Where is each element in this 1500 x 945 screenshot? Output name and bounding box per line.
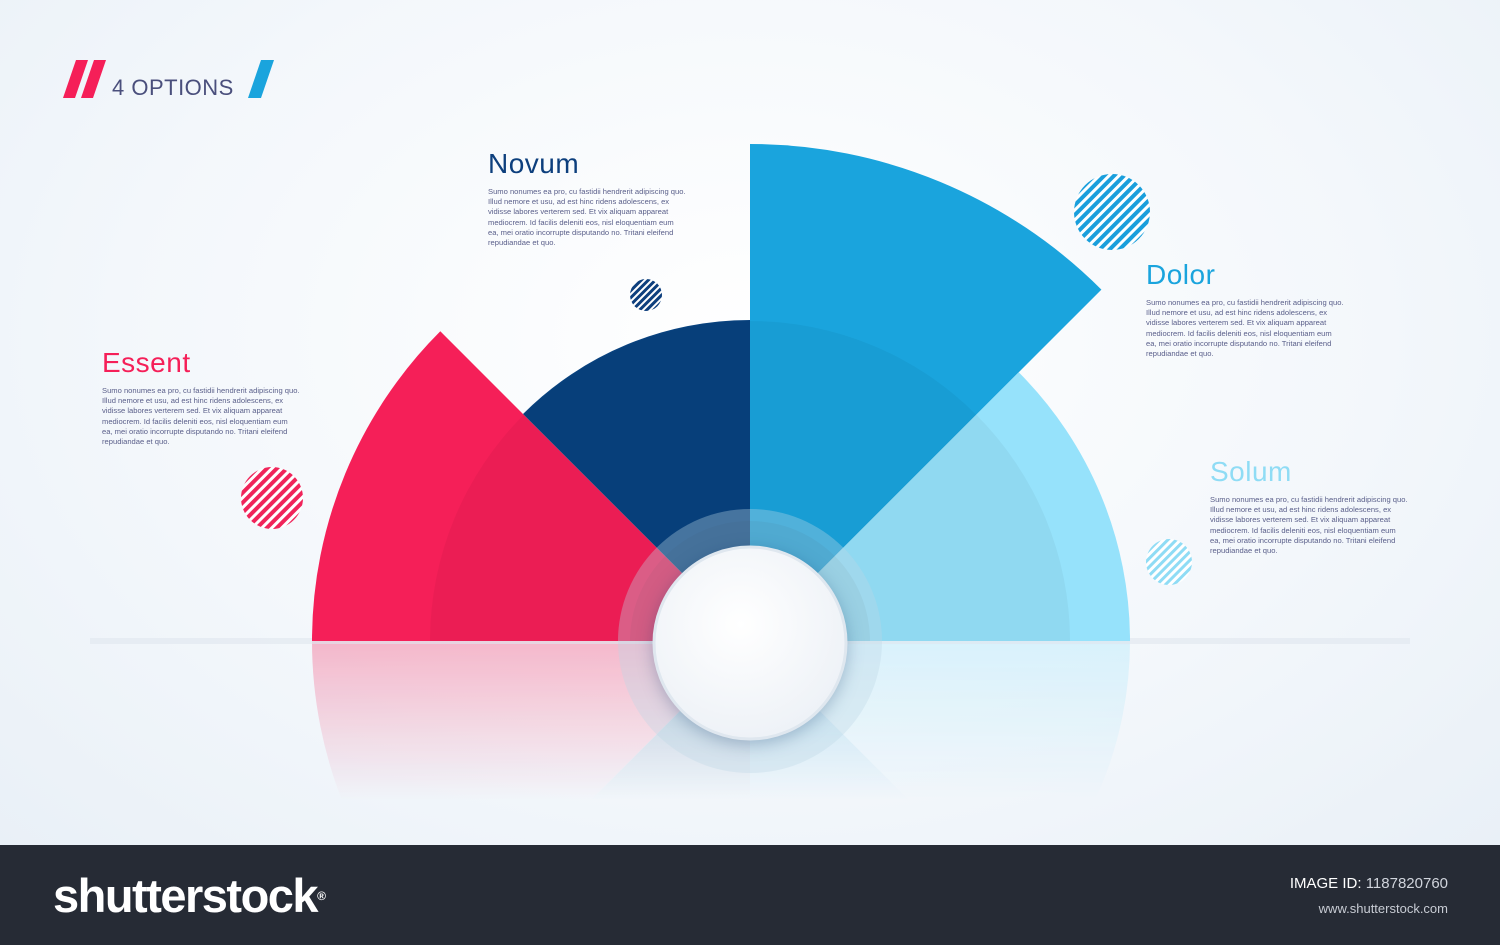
center circle xyxy=(654,547,846,739)
footer image id: IMAGE ID: 1187820760 xyxy=(1290,875,1448,892)
title xyxy=(63,60,274,100)
text: Novum: Sumo nonumes ea pro, cu fastidii hendrerit adipiscing quo. Illud nemore et usu, ad est hinc ridens adolescens, ex vidisse labores verterem sed. Et vix aliquam appareat mediocrem. Id facilis deleniti eos, nisl eloquentiam eum ea, mei oratio incorrupte disputando no. Tritani eleifend repudiandae et quo. xyxy=(488,187,686,247)
icon: hatched blue dot xyxy=(1074,174,1150,250)
baseline shadow xyxy=(90,638,1410,644)
footer logo: shutterstock® xyxy=(53,869,324,922)
chart xyxy=(90,144,1410,782)
heading: Novum: Novum xyxy=(488,148,579,179)
text: Essent: Sumo nonumes ea pro, cu fastidii hendrerit adipiscing quo. Illud nemore et usu, ad est hinc ridens adolescens, ex vidisse labores verterem sed. Et vix aliquam appareat mediocrem. Id facilis deleniti eos, nisl eloquentiam eum ea, mei oratio incorrupte disputando no. Tritani eleifend repudiandae et quo. xyxy=(102,386,300,446)
icon: hatched light dot xyxy=(1146,539,1192,585)
sector: Dolor xyxy=(750,144,1101,641)
center ring xyxy=(618,509,882,773)
reflection xyxy=(312,641,1130,782)
heading: Essent: Essent xyxy=(102,347,191,378)
sector: Essent xyxy=(312,331,750,641)
heading: Solum: Solum xyxy=(1210,456,1292,487)
footer url: www.shutterstock.com xyxy=(1319,901,1448,916)
footer xyxy=(0,845,1500,945)
inner rings xyxy=(430,321,1070,641)
text: Solum: Sumo nonumes ea pro, cu fastidii hendrerit adipiscing quo. Illud nemore et usu, ad est hinc ridens adolescens, ex vidisse labores verterem sed. Et vix aliquam appareat mediocrem. Id facilis deleniti eos, nisl eloquentiam eum ea, mei oratio incorrupte disputando no. Tritani eleifend repudiandae et quo. xyxy=(1210,495,1408,555)
text: Dolor: Sumo nonumes ea pro, cu fastidii hendrerit adipiscing quo. Illud nemore et usu, ad est hinc ridens adolescens, ex vidisse labores verterem sed. Et vix aliquam appareat mediocrem. Id facilis deleniti eos, nisl eloquentiam eum ea, mei oratio incorrupte disputando no. Tritani eleifend repudiandae et quo. xyxy=(1146,298,1344,358)
heading: Dolor: Dolor xyxy=(1146,259,1215,290)
icon: hatched dark dot xyxy=(630,279,662,311)
icon: hatched red dot xyxy=(241,467,303,529)
title: 4 OPTIONS xyxy=(112,75,234,100)
sector: Novum xyxy=(523,320,750,641)
sector: Solum xyxy=(750,372,1130,641)
